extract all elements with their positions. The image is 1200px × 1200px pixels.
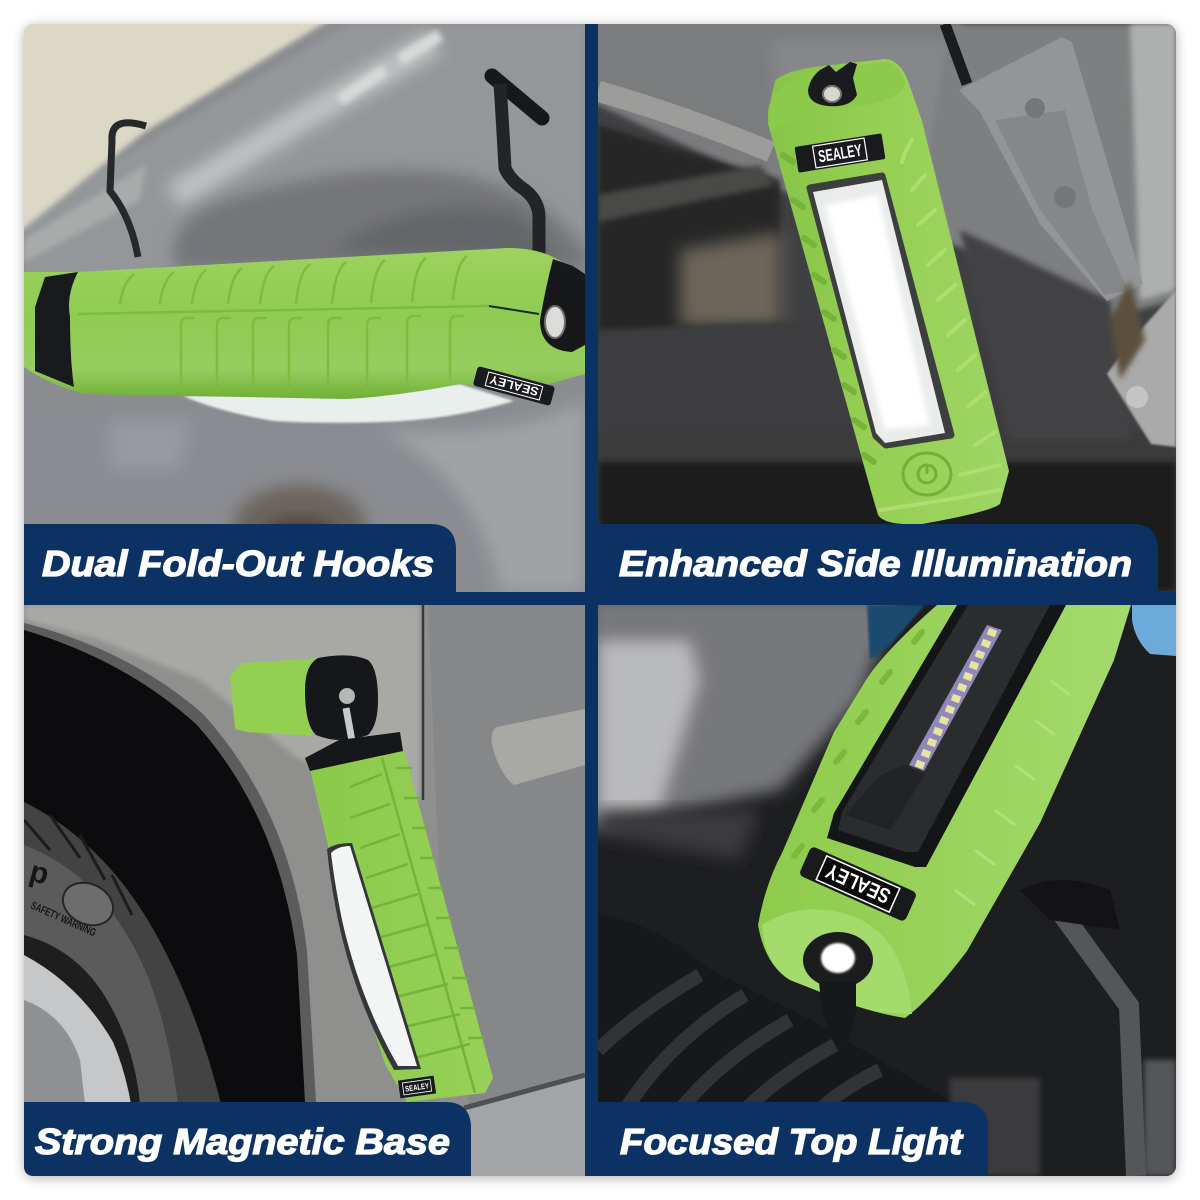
top LED light — [803, 932, 873, 988]
panel: Enhanced Side Illumination — [588, 14, 1176, 592]
caption: Enhanced Side Illumination — [585, 524, 1158, 592]
lamp body — [310, 747, 493, 1102]
caption: Enhanced Side Illumination: Enhanced Side Illumination — [619, 543, 1132, 584]
wheel arch — [24, 623, 316, 1102]
light panel — [810, 176, 951, 445]
ribbed hose — [598, 914, 1000, 1176]
sill — [464, 1075, 585, 1176]
icon: pivot joint — [540, 259, 585, 352]
panel: Strong Magnetic Base — [24, 605, 585, 1176]
black light housing — [827, 605, 1066, 867]
caption: Strong Magnetic Base: Strong Magnetic Base — [35, 1121, 450, 1162]
icon: power button — [903, 453, 951, 495]
SEALEY badge: SEALEY — [823, 859, 894, 907]
lamp body — [24, 248, 585, 399]
icon: left hook — [110, 123, 146, 257]
tyre sidewall text: SAFETY WARNING — [29, 900, 98, 939]
panel: Strong Magnetic Base: p — [26, 855, 52, 892]
caption: Strong Magnetic Base — [24, 1102, 471, 1176]
wheel rim — [24, 955, 131, 1104]
tyre — [24, 802, 221, 1104]
panel: Dual Fold-Out Hooks — [14, 14, 585, 592]
SEALEY badge: SEALEY — [405, 1081, 430, 1094]
SEALEY badge: SEALEY — [488, 372, 540, 399]
lamp body — [758, 605, 1131, 1018]
SEALEY badge — [473, 366, 555, 406]
SEALEY badge — [799, 846, 917, 922]
light glow — [183, 384, 514, 423]
caption: Focused Top Light — [585, 1102, 988, 1176]
SEALEY badge — [398, 1076, 436, 1098]
caption: Dual Fold-Out Hooks — [24, 524, 456, 592]
hook slot — [492, 76, 542, 118]
panel: Focused Top Light — [588, 595, 1176, 1176]
SEALEY badge: SEALEY — [817, 141, 864, 166]
light strip — [327, 843, 421, 1070]
caption: Dual Fold-Out Hooks: Dual Fold-Out Hooks — [42, 543, 434, 584]
LED strip — [909, 625, 1002, 771]
SEALEY badge — [795, 133, 885, 173]
lamp body — [768, 59, 1009, 524]
icon: right hook — [500, 84, 539, 254]
magnetic base head — [230, 658, 321, 736]
tyre logo — [62, 882, 114, 926]
glove — [867, 605, 925, 660]
caption: Focused Top Light: Focused Top Light — [620, 1121, 964, 1162]
door handle — [492, 709, 585, 785]
metal bracket — [959, 37, 1143, 301]
icon: hook mount — [808, 62, 857, 106]
